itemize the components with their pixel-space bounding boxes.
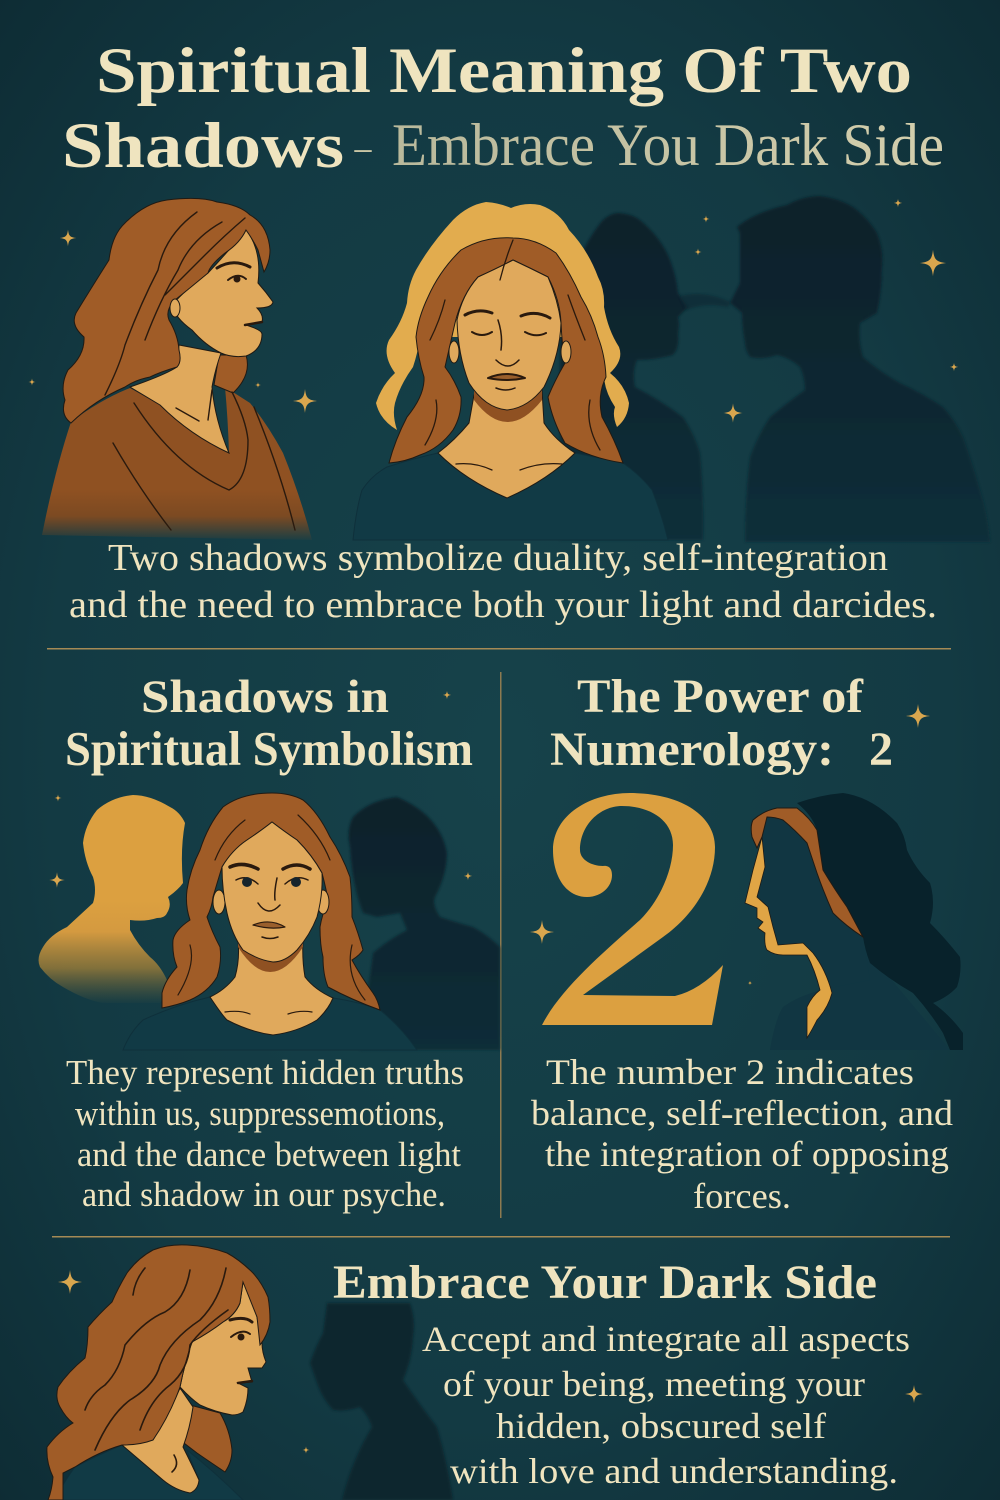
panel: the power of numerology <box>531 670 963 1216</box>
neck <box>130 345 229 453</box>
numeral 2 <box>542 793 723 1025</box>
silhouette: dark shadow <box>349 797 500 1050</box>
sparkles: hero <box>28 199 958 423</box>
figure: profile woman <box>42 198 312 540</box>
eye <box>238 1334 244 1340</box>
figure: woman in profile <box>47 1245 270 1500</box>
title: Shadows <box>62 110 344 182</box>
title: – <box>354 127 372 169</box>
neck <box>210 940 333 1035</box>
hair strands <box>85 1268 252 1472</box>
text: of your being, meeting your <box>443 1364 865 1404</box>
text <box>531 1052 953 1216</box>
details <box>105 212 295 530</box>
neck <box>438 390 575 498</box>
illustration: hero figures <box>42 196 990 542</box>
ear <box>170 299 180 317</box>
face <box>180 1282 266 1415</box>
hair <box>162 793 380 1010</box>
text: and shadow in our psyche. <box>82 1175 446 1214</box>
text: and the dance between light <box>77 1135 461 1174</box>
neck <box>122 1388 199 1493</box>
panel: shadows in spiritual symbolism <box>39 671 500 1214</box>
silhouette: far shadow <box>560 213 703 540</box>
face details <box>178 815 365 1014</box>
back hair <box>180 1405 232 1472</box>
ear right <box>317 890 329 914</box>
brown hair <box>751 808 863 937</box>
text: They represent hidden truths <box>66 1053 464 1092</box>
heading: Shadows in <box>141 671 389 723</box>
chin shadow <box>238 935 303 972</box>
silhouette: near shadow <box>730 196 990 542</box>
text: hidden, obscured self <box>496 1406 826 1446</box>
text: balance, self-reflection, and <box>531 1093 953 1133</box>
face fill <box>757 817 870 990</box>
heading: Embrace Your Dark Side <box>333 1256 877 1309</box>
robe <box>42 387 312 540</box>
icon: sparkle <box>58 1270 82 1294</box>
text: with love and understanding. <box>450 1451 898 1491</box>
shirt <box>55 1445 243 1500</box>
eye <box>234 276 240 282</box>
shirt <box>353 453 668 540</box>
panel: embrace your dark side <box>47 1245 923 1500</box>
hair <box>47 1245 270 1500</box>
halo hair <box>376 202 629 430</box>
title: Embrace You Dark Side <box>392 112 944 178</box>
silhouette: woman profile <box>745 793 963 1050</box>
body <box>770 930 950 1050</box>
shirt <box>123 997 417 1050</box>
hair <box>389 238 623 463</box>
title: Spiritual Meaning Of Two <box>96 35 912 107</box>
intro text: and the need to embrace both your light and darcides. <box>69 584 937 626</box>
silhouette: shadow behind woman <box>310 1303 453 1500</box>
heading <box>65 671 473 776</box>
chin shadow <box>474 385 542 422</box>
figure: front woman with halo <box>353 202 668 540</box>
title <box>62 35 944 182</box>
text: forces. <box>693 1176 791 1216</box>
ear right <box>561 341 571 363</box>
illustration: woman between gold and dark shadows <box>39 793 500 1050</box>
icon: sparkle <box>905 1385 923 1403</box>
heading: Numerology: <box>550 723 834 776</box>
silhouette: bridge between shadows <box>680 294 730 310</box>
ears <box>213 890 225 914</box>
gold profile line <box>745 837 832 1038</box>
text: within us, suppressemotions, <box>75 1094 445 1133</box>
face details <box>425 240 600 470</box>
text: Accept and integrate all aspects <box>422 1319 910 1359</box>
text: the integration of opposing <box>545 1134 949 1174</box>
text <box>422 1319 910 1491</box>
heading: The Power of <box>577 670 864 723</box>
ears <box>449 341 459 363</box>
face <box>457 260 561 410</box>
intro text: Two shadows symbolize duality, self-integration <box>108 537 888 579</box>
text: The number 2 indicates <box>546 1052 914 1092</box>
hair <box>63 198 270 423</box>
face <box>222 822 322 962</box>
dark hair <box>797 793 963 1050</box>
eyes <box>242 877 301 887</box>
back hair <box>214 355 247 393</box>
sparkles: middle <box>49 691 930 985</box>
face <box>172 230 273 357</box>
intro text <box>69 537 937 626</box>
heading <box>550 670 893 776</box>
heading: Spiritual Symbolism <box>65 721 473 776</box>
text <box>66 1053 464 1214</box>
silhouette: gold shadow <box>39 795 185 1003</box>
icon: small sparkle <box>302 1446 310 1454</box>
heading: 2 <box>869 723 893 776</box>
